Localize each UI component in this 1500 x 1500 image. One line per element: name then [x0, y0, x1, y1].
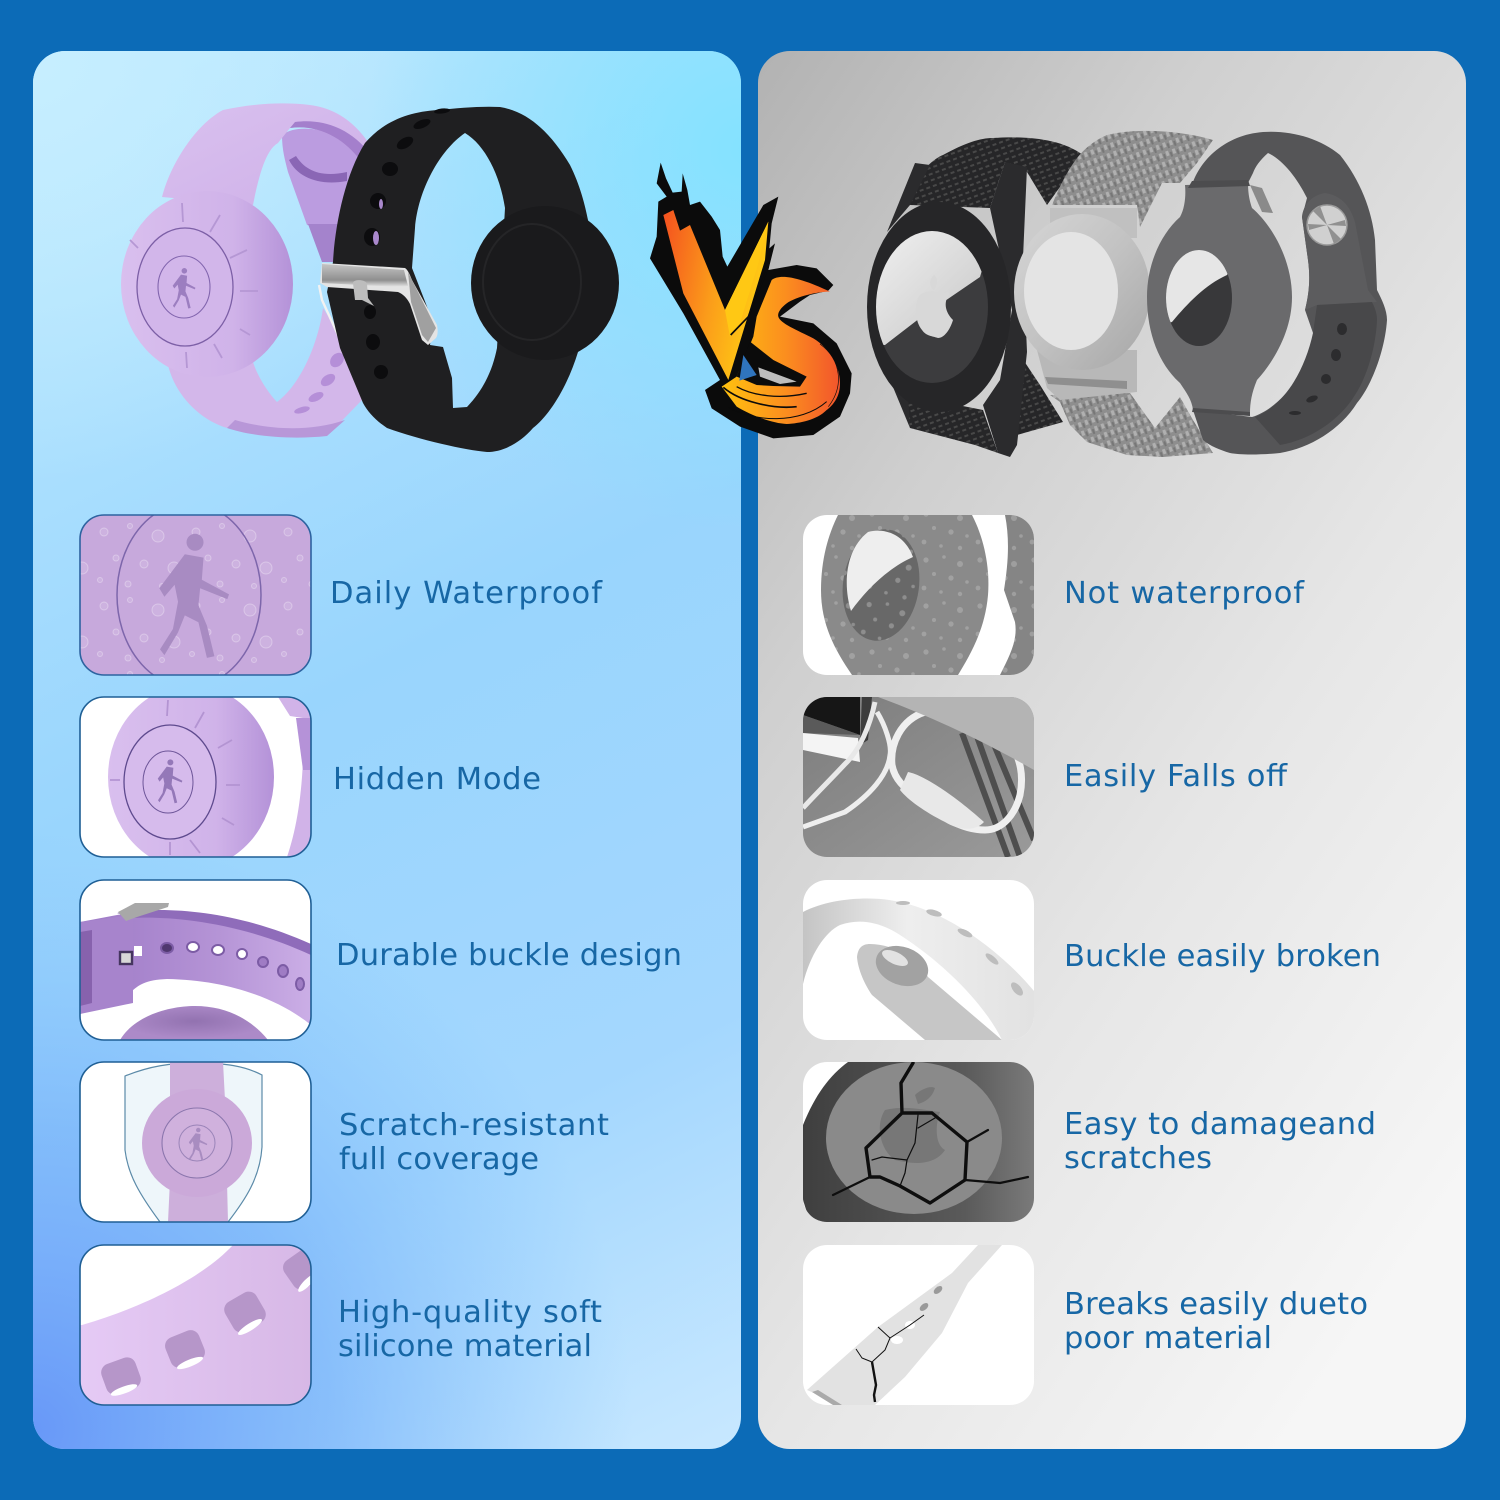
label: Not waterproof	[1064, 576, 1305, 611]
row 5 right: Breaks easily	[803, 1245, 1368, 1405]
thumbnail: cracked tracker	[803, 1062, 1034, 1222]
panel: left product	[33, 51, 741, 1449]
row 2 right: Easily Falls off	[803, 697, 1288, 857]
label: poor material	[1064, 1321, 1272, 1356]
row 3 left: Durable buckle design	[80, 880, 682, 1040]
thumbnail: waterproof surface	[79, 514, 312, 676]
dark grey silicone band	[1147, 132, 1387, 455]
row 1 left: Daily Waterproof	[79, 514, 603, 676]
label: scratches	[1064, 1141, 1212, 1176]
label: Breaks easily dueto	[1064, 1287, 1368, 1322]
label: Daily Waterproof	[330, 576, 603, 611]
label: Durable buckle design	[336, 938, 682, 973]
label: High-quality soft	[338, 1295, 602, 1330]
label: Buckle easily broken	[1064, 939, 1381, 974]
row 4 left: Scratch-resistant	[80, 1062, 609, 1222]
row 2 left: Hidden Mode	[79, 696, 540, 858]
thumbnail: broken buckle	[803, 880, 1034, 1040]
VS emblem	[650, 163, 852, 438]
thumbnail: shield coverage	[80, 1062, 311, 1222]
label	[338, 1295, 602, 1364]
label: silicone material	[338, 1329, 592, 1364]
thumbnail: hidden disc	[79, 696, 312, 858]
thumbnail: buckle strap	[80, 880, 311, 1040]
buckle	[320, 263, 438, 345]
label: Scratch-resistant	[339, 1108, 609, 1143]
row 5 left: High-quality soft	[80, 1245, 602, 1412]
label	[339, 1108, 609, 1177]
thumbnail: silicone strap	[80, 1245, 328, 1412]
thumbnail: fallen tracker photo	[803, 697, 1034, 857]
label	[1064, 1107, 1376, 1176]
label	[1064, 1287, 1368, 1356]
label: Easy to damageand	[1064, 1107, 1376, 1142]
grey nylon band	[1014, 131, 1213, 457]
lavender wristband	[121, 103, 370, 438]
row 3 right: Buckle easily broken	[803, 880, 1381, 1040]
label: Easily Falls off	[1064, 759, 1288, 794]
row 1 right: Not waterproof	[803, 515, 1305, 675]
black wristband	[327, 107, 619, 452]
label: full coverage	[339, 1142, 539, 1177]
black nylon band	[867, 137, 1083, 457]
row 4 right: Easy to damage	[803, 1062, 1376, 1222]
thumbnail: cracked strap	[803, 1245, 1034, 1405]
thumbnail: wet case	[803, 515, 1034, 675]
label: Hidden Mode	[333, 762, 541, 797]
panel: right competitors	[758, 51, 1466, 1449]
